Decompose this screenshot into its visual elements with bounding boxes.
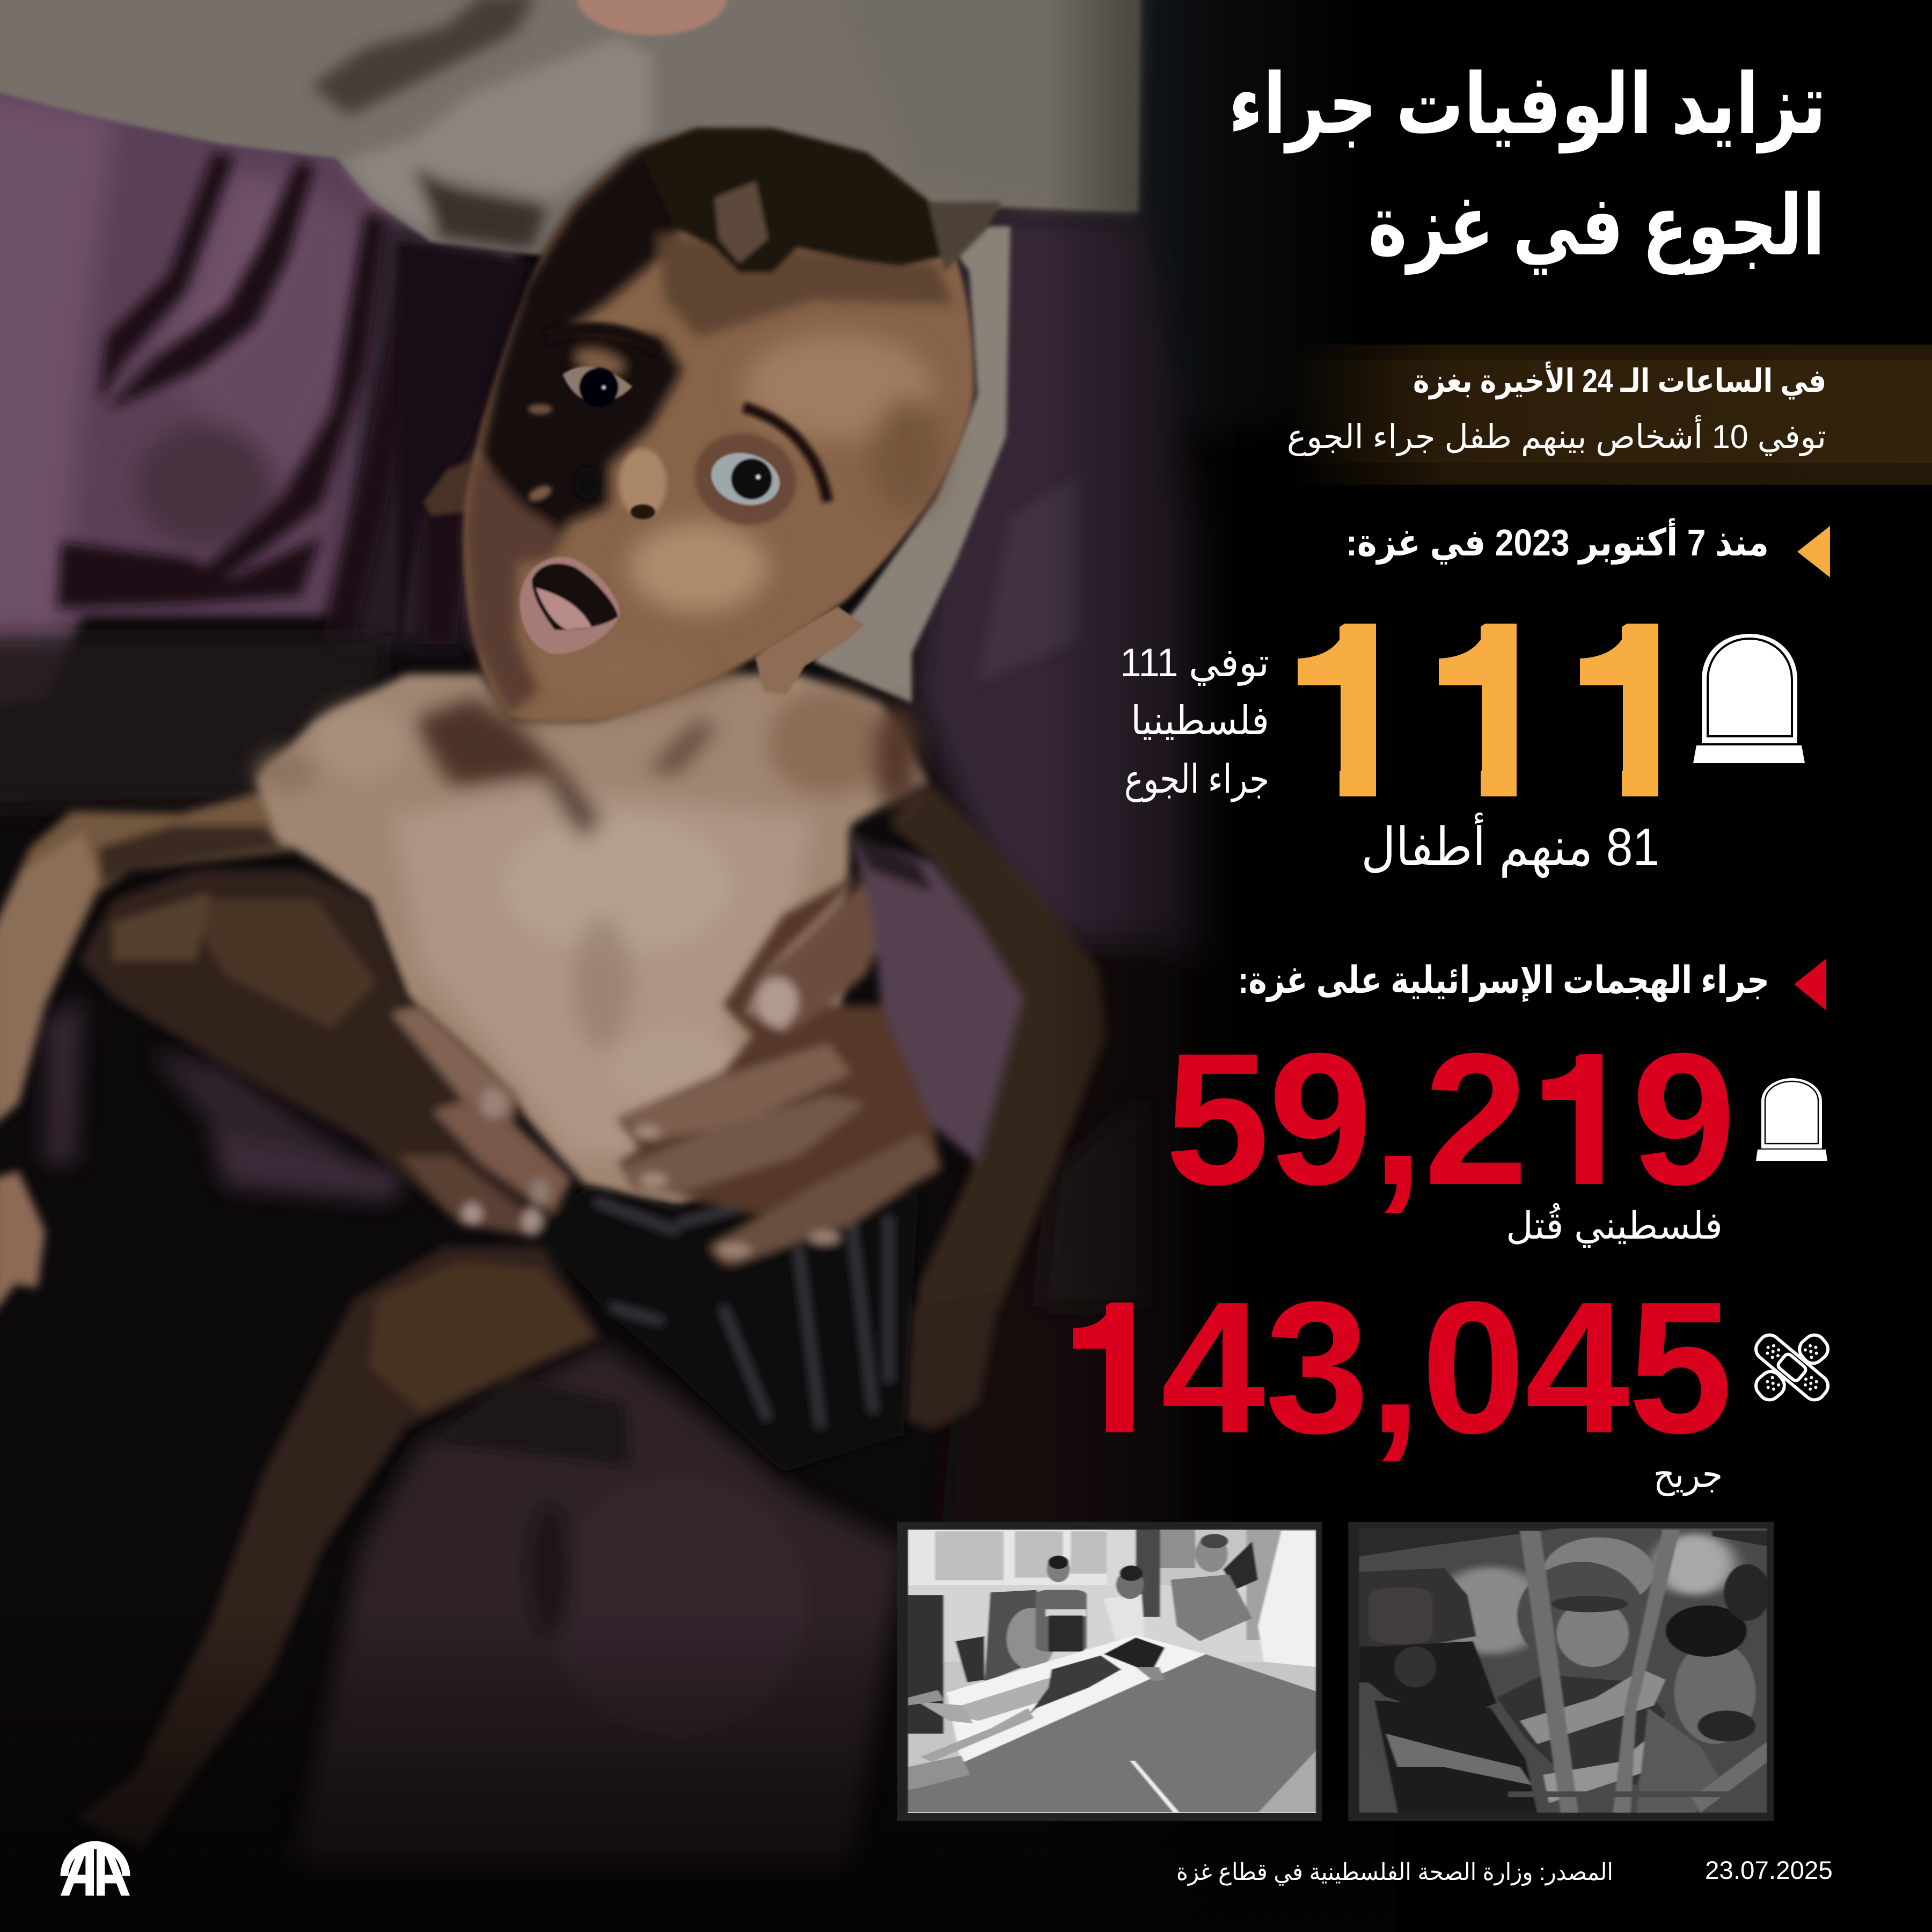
left purple garment and folds — [0, 82, 534, 706]
stat: 111 starvation deaths: 111 — [1284, 569, 1706, 850]
text: 111 Palestinians died of hunger: فلسطينيا — [1131, 698, 1269, 743]
source line: المصدر: وزارة الصحة الفلسطينية في قطاع غزة — [1176, 1859, 1613, 1886]
child's body — [0, 636, 1145, 1864]
text: last 24 hours: في الساعات الـ 24 الأخيرة بغزة — [1413, 361, 1826, 400]
darkening of the photo toward the right — [1046, 0, 1379, 1932]
icon: small tombstone — [1756, 1078, 1827, 1161]
adult left arm and hand — [79, 870, 572, 1239]
mouth — [519, 557, 620, 654]
shadow across face — [480, 132, 698, 551]
child's hand — [0, 1171, 45, 1311]
left arm of child — [0, 787, 290, 1126]
text: wounded: جريح — [1653, 1453, 1723, 1496]
far ear — [423, 460, 470, 516]
text: last 24 hours: توفي 10 أشخاص بينهم طفل جراء الجوع — [1287, 415, 1826, 457]
heading: Israeli attacks on Gaza: جراء الهجمات الإسرائيلية على غزة: — [1238, 959, 1769, 1002]
text: 111 Palestinians died of hunger: توفي 111 — [1120, 640, 1269, 686]
neck shadows — [414, 697, 602, 841]
nostril — [631, 504, 655, 519]
title: الجوع في غزة — [1368, 179, 1825, 275]
hairline band — [657, 235, 953, 338]
darkening of the photo toward the bottom — [0, 1610, 1395, 1932]
near ear — [756, 606, 865, 694]
child's head — [423, 128, 1002, 722]
text: 81 of them children: 81 منهم أطفال — [1361, 813, 1659, 878]
stat: 111 starvation deaths — [1298, 624, 1658, 796]
adult skin at top — [577, 0, 727, 35]
photo base — [0, 0, 1234, 1932]
icon: large tombstone — [1693, 634, 1805, 763]
area behind head: grey cloth and right garment — [398, 226, 1076, 703]
grey scarf — [0, 0, 1140, 263]
stat: 143,045 wounded: 143,045 — [1064, 1263, 1733, 1473]
logo: AA — [61, 1845, 130, 1896]
text: 111 Palestinians died of hunger — [1120, 640, 1269, 802]
right arm of child — [889, 780, 1107, 1427]
torso — [256, 674, 926, 1205]
hair — [641, 128, 977, 272]
ear lobe — [757, 636, 798, 695]
highlight band — [1288, 345, 1932, 485]
main photo: emaciated child held by an adult — [0, 0, 1395, 1932]
arrow: red section marker — [1794, 958, 1826, 1011]
adult right hand — [617, 870, 941, 1265]
right eye — [705, 445, 786, 513]
arrow: orange section marker — [1797, 526, 1830, 577]
title — [1228, 58, 1826, 275]
photo: body on a stretcher — [897, 1522, 1322, 1821]
black plastic bag — [535, 1171, 919, 1472]
left eye — [562, 367, 633, 402]
icon: crossed bandages — [1752, 1330, 1832, 1404]
stat: 59,219 killed: 59,219 — [1165, 1014, 1736, 1224]
text: last 24 hours — [1287, 361, 1826, 457]
purple lap cloth — [294, 1344, 904, 1864]
scarf tones and shading — [311, 0, 1140, 250]
heading: since 7 October 2023: منذ 7 أكتوبر 2023 في غزة: — [1346, 518, 1769, 565]
photo: crowd waiting for food — [1348, 1522, 1774, 1821]
text: Palestinians killed: فلسطيني قُتل — [1506, 1203, 1723, 1248]
leg — [75, 1246, 602, 1849]
date: 23.07.2025 — [1705, 1856, 1833, 1885]
text: 111 Palestinians died of hunger: جراء الجوع — [1124, 757, 1269, 802]
purple cloth on child's side — [851, 836, 1024, 1163]
head base — [464, 129, 974, 722]
